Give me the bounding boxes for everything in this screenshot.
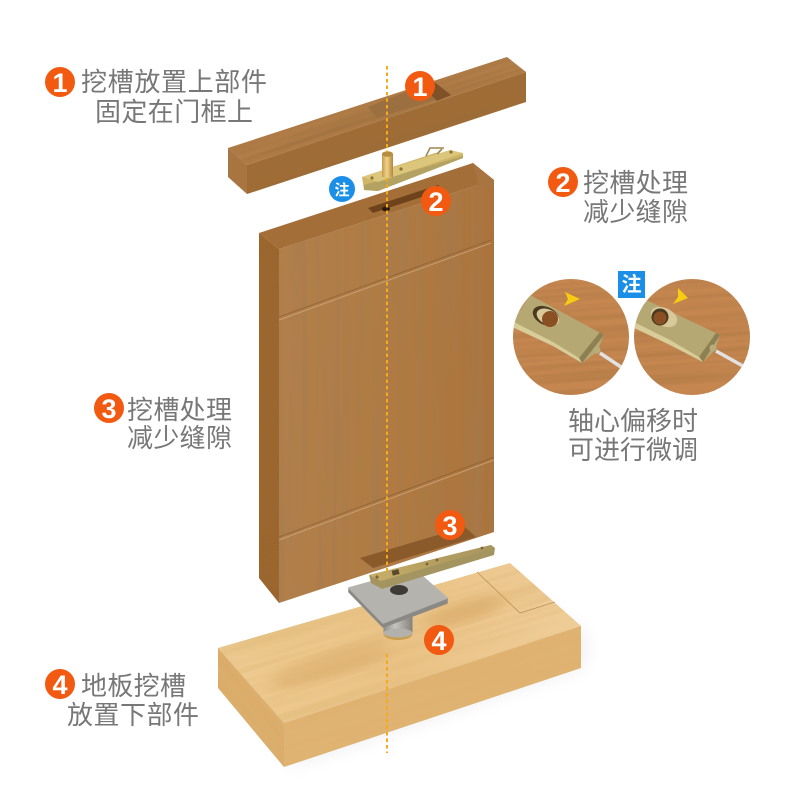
step 4 label: 4: [52, 670, 68, 700]
door bottom notch: [360, 527, 476, 568]
floor pivot hardware: [349, 545, 495, 640]
step 1 label: 1: [52, 68, 68, 98]
yellow arrow left: [564, 292, 580, 306]
step 4 label: 地板挖槽: [81, 671, 186, 701]
adjustment caption: 轴心偏移时: [568, 406, 698, 436]
step 1 label: [45, 67, 267, 127]
step 3 label: 挖槽处理: [127, 395, 232, 425]
top pivot pin: [382, 151, 393, 177]
badge 1 on beam: [405, 71, 435, 102]
step 2 label: [548, 167, 688, 227]
badge 2 on door: 2: [428, 187, 444, 217]
step 3 label: [94, 393, 232, 453]
step 1 label: 固定在门框上: [95, 97, 253, 127]
badge 1 on beam: 1: [412, 72, 428, 102]
badge 4 on floor: [424, 625, 454, 656]
step 4 label: 放置下部件: [67, 700, 199, 730]
step 3 label: 3: [101, 394, 117, 424]
top door frame beam: [228, 57, 526, 194]
note square badge: 注: [622, 273, 642, 296]
detail circle left: [513, 279, 629, 395]
step 2 label: 挖槽处理: [583, 168, 688, 198]
grey plate: [349, 570, 447, 627]
adjustment caption: 可进行微调: [568, 435, 698, 465]
badge 2 on door: [421, 186, 451, 217]
step 2 label: 2: [555, 168, 571, 198]
detail circle right: [634, 279, 750, 395]
door panel: [255, 163, 505, 610]
brass arm: [369, 545, 495, 589]
badge 3 on door: [435, 510, 465, 541]
yellow arrow right: [673, 288, 688, 304]
badge 3 on door: 3: [442, 511, 458, 541]
badge 4 on floor: 4: [431, 626, 447, 656]
floor cylinder: [384, 612, 412, 640]
adjustment caption: [568, 406, 698, 465]
step 1 label: 挖槽放置上部件: [81, 67, 267, 97]
note square badge: [618, 271, 645, 298]
floor block: [218, 563, 585, 767]
step 2 label: 减少缝隙: [583, 197, 688, 227]
pivot hole: [382, 206, 390, 212]
dashed axis line: [386, 66, 388, 753]
step 4 label: [45, 669, 199, 730]
beam notch: [368, 81, 451, 118]
note badge: [329, 176, 355, 202]
door top notch: [368, 185, 443, 213]
note badge: 注: [334, 181, 350, 199]
top pivot hardware: [362, 148, 463, 191]
step 3 label: 减少缝隙: [127, 423, 232, 453]
